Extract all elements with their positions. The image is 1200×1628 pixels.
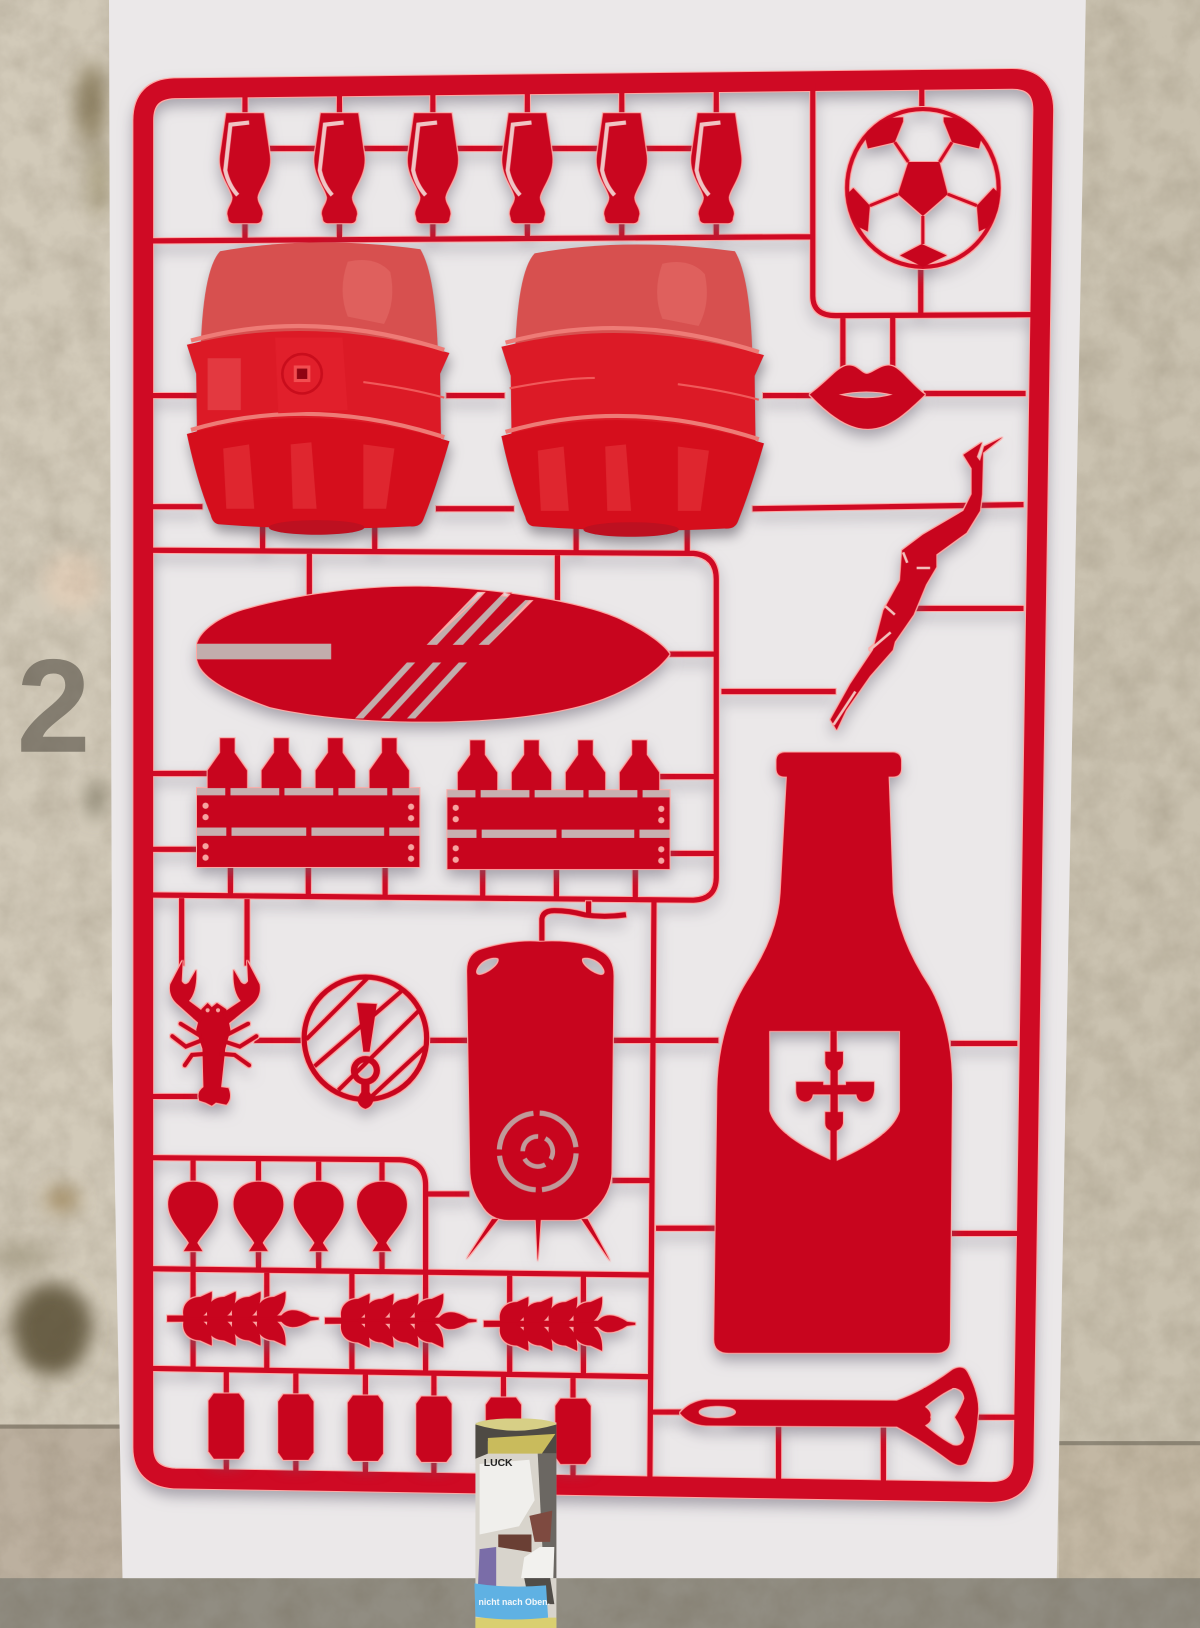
blue sticker	[474, 1583, 550, 1619]
shield cross emblem	[796, 1031, 874, 1162]
keg, right	[501, 244, 764, 537]
crate of bottles, left	[197, 738, 419, 867]
row of cans	[209, 1393, 591, 1464]
icon: bottle opener	[680, 1367, 978, 1465]
icon: beer tank	[466, 901, 626, 1261]
parts sheet	[167, 109, 1003, 1465]
row of wheat ears	[167, 1292, 635, 1351]
painted house number: 2	[17, 633, 91, 781]
inner runner lines	[153, 83, 1034, 1489]
outer frame	[143, 79, 1043, 1492]
blue sticker: nicht nach Oben.	[479, 1597, 550, 1607]
icon: football	[847, 109, 999, 267]
post lettering: LUCK	[484, 1458, 513, 1469]
icon: diver	[830, 437, 1003, 730]
icon: surfboard	[197, 587, 670, 722]
red plastic sprue frame and runners	[143, 79, 1043, 1492]
weathered street post	[474, 1418, 556, 1628]
row of hop cones	[168, 1182, 407, 1251]
crate of bottles, right	[447, 740, 670, 869]
icon: beer tap roundel	[304, 977, 428, 1109]
row of six beer glasses	[220, 113, 741, 223]
kegs	[187, 242, 764, 537]
keg, left, with valve	[187, 242, 449, 535]
icon: lobster	[170, 960, 260, 1106]
icon: lips	[810, 365, 925, 429]
icon: bottle with shield cut-out	[714, 753, 952, 1353]
white backing panel	[109, 0, 1086, 1578]
